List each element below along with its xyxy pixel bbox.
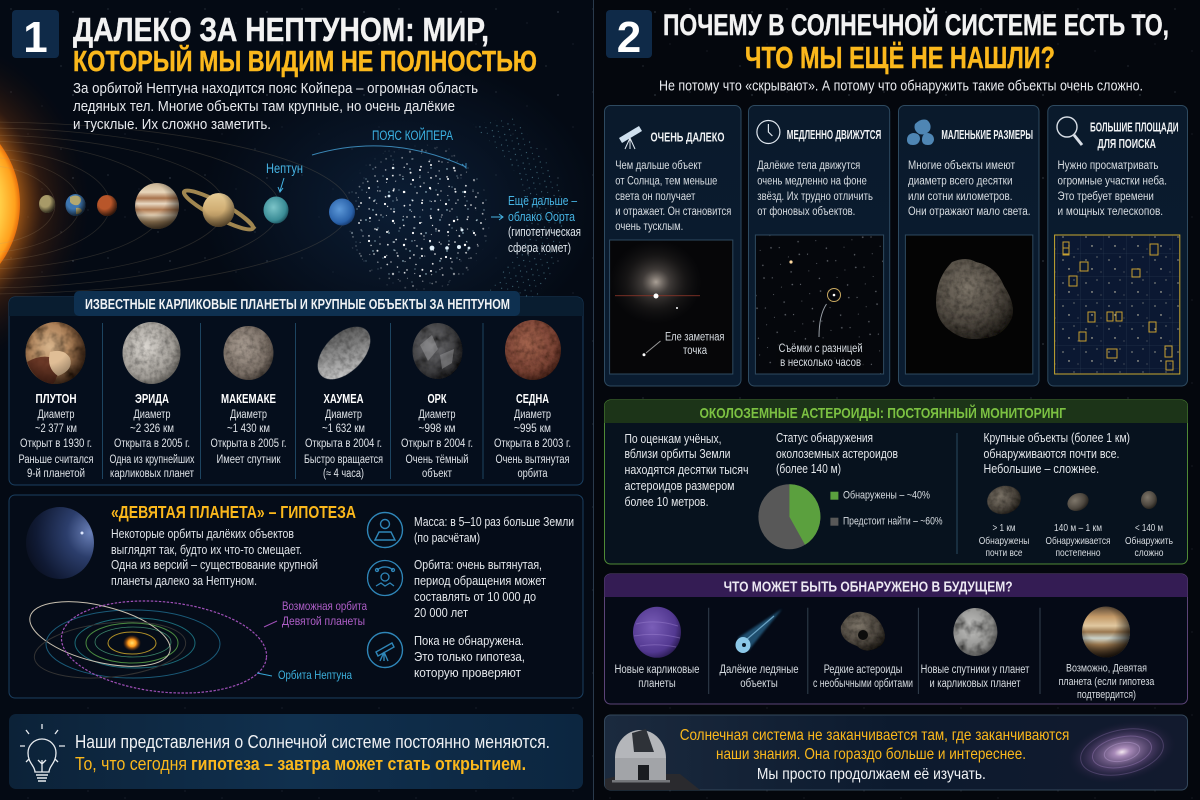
Haumea text: (≈ 4 часа) [323,468,364,480]
image: sky survey [1055,235,1180,374]
Kuiper belt dots [343,144,490,291]
closing text: наши знания. Она гораздо больше и интереснее. [716,746,1026,763]
image: faint point: Еле заметная [665,332,724,344]
label: Kuiper belt [312,128,466,168]
Sedna text [494,392,571,480]
possibly planet nine: планета (если гипотеза [1059,676,1155,688]
Sedna text: Диаметр [514,409,551,421]
large objects text: обнаруживаются почти все. [984,447,1120,461]
badge: number 2: 2 [617,13,641,62]
large objects text [984,431,1130,476]
Pluto text: Открыт в 1930 г. [20,438,92,450]
Haumea [308,317,380,389]
card title: ДЛЯ ПОИСКА [1098,136,1156,151]
asteroid: small: сложно [1134,547,1164,559]
Sedna text: ~995 км [514,423,551,435]
detection status heading: Статус обнаружения [776,431,873,445]
image: moving object [755,235,884,374]
asteroid: small [1125,491,1173,559]
intro paragraph: ледяных тел. Многие объекты там крупные, но очень далёкие [73,99,455,115]
card text: и мощных телескопов. [1058,206,1163,218]
asteroid: small: < 140 м [1135,522,1163,534]
Sedna text: орбита [518,468,548,480]
fact: orbit: 20 000 лет [414,605,468,620]
Makemake text: МАКЕМАКЕ [221,392,276,406]
Saturn [181,185,256,235]
galaxy [1061,711,1183,793]
asteroid estimate text: вблизи орбиты Земли [624,447,731,461]
banner: closing statement [604,711,1188,793]
label: Neptune: Нептун [266,161,303,176]
panel: ninth planet hypothesis [9,495,583,703]
fact: mass [414,514,574,545]
legend: Обнаружены – ~40% [843,490,930,502]
legend: Предстоит найти – ~60% [843,516,943,528]
card text: очень тусклым. [615,221,683,233]
icy objects: Далёкие ледяные [720,664,798,676]
card title: МАЛЕНЬКИЕ РАЗМЕРЫ [941,127,1033,142]
large objects text: Небольшие – сложнее. [984,462,1099,476]
image: moving object: в несколько часов [780,357,861,369]
section 1 heading [12,10,537,133]
panel: slow movement [748,106,890,386]
orbit diagram [23,589,271,703]
observatory [605,729,700,790]
callout: knowledge changes [9,714,583,789]
Orcus text: Диаметр [418,409,456,421]
rare asteroids: Редкие астероиды [824,664,902,676]
badge: number 1 [12,10,59,62]
intro paragraph: и тусклые. Их сложно заметить. [73,117,271,133]
Eris text: Диаметр [134,409,170,421]
new dwarf planets: планеты [638,678,676,690]
Pluto text [18,392,94,480]
Makemake [224,326,274,380]
label: possible orbit: Девятой планеты [282,614,365,628]
asteroid estimate text [624,432,748,509]
card text [1058,160,1167,218]
panel: small size [898,106,1039,386]
Neptune planet [329,198,355,226]
Makemake text: Имеет спутник [216,454,281,466]
rare asteroids: с необычными орбитами [813,678,913,690]
fact: mass: (по расчётам) [414,530,480,545]
intro paragraph [73,81,478,133]
asteroid: medium: постепенно [1056,547,1101,559]
card text [757,160,873,218]
legend [830,490,943,528]
label: Neptune orbit [257,668,352,682]
heading: dwarf planets: ИЗВЕСТНЫЕ КАРЛИКОВЫЕ ПЛАНЕТЫ И КРУПНЫЕ ОБЪЕКТЫ ЗА НЕПТУНОМ [85,297,510,313]
Pluto [26,322,86,384]
panel: very far [604,106,741,386]
Eris text: Одна из крупнейших [110,454,195,466]
badge: number 2 [606,10,652,62]
image: faint point [610,240,733,374]
hypothesis paragraph: Некоторые орбиты далёких объектов [111,527,294,541]
asteroid: medium: 140 м – 1 км [1054,522,1102,534]
card text: звёзд. Их трудно отличить [757,191,873,203]
hypothesis paragraph: выглядят так, будто их что-то смещает. [111,543,302,557]
fact: not found: Пока не обнаружена. [414,633,524,648]
heading: future: ЧТО МОЖЕТ БЫТЬ ОБНАРУЖЕНО В БУДУЩЕМ? [724,580,1013,596]
card text: и отражает. Он становится [615,206,731,218]
Sedna [505,320,561,380]
Haumea text: Открыта в 2004 г. [305,438,382,450]
hypothesis paragraph: Одна из версий – существование крупной [111,558,318,572]
card text: Чем дальше объект [615,160,702,172]
hypothesis heading: «ДЕВЯТАЯ ПЛАНЕТА» – ГИПОТЕЗА [111,502,356,522]
icon: telescope [368,632,402,668]
label: Neptune orbit: Орбита Нептуна [278,668,352,682]
Eris [122,322,180,384]
Jupiter [135,183,179,229]
icy objects: объекты [740,678,778,690]
Uranus [264,196,288,224]
detection status heading: (более 140 м) [776,462,841,476]
asteroid: small: Обнаружить [1125,535,1173,547]
asteroid: large [979,482,1029,559]
Pluto text: 9-й планетой [27,468,85,480]
card title [1090,120,1179,151]
card text: Они отражают мало света. [908,206,1030,218]
label: Oort cloud: Ещё дальше – [508,193,578,208]
asteroid: large: Обнаружены [979,535,1029,547]
intro paragraph: За орбитой Нептуна находится пояс Койпера – огромная область [73,81,478,97]
possibly planet nine: подтвердится) [1077,689,1136,701]
detection status heading [776,431,898,476]
icon: orbit [368,560,402,596]
callout line 2: То, что сегодня [75,754,187,774]
icon: clock [757,120,780,144]
Pluto text: Диаметр [38,409,74,421]
sun [0,34,90,374]
card text: или сотни километров. [908,191,1012,203]
Mercury [39,195,55,213]
asteroid: medium: Обнаруживается [1046,535,1110,547]
icon: light bulb [20,724,65,781]
asteroid: large: > 1 км [992,522,1016,534]
image: small asteroid [905,235,1033,374]
Orcus text: Открыт в 2004 г. [401,438,473,450]
new moons: Новые спутники у планет [921,664,1030,676]
fact: not found [414,633,525,680]
label: Neptune [266,161,303,192]
Sedna text: Открыта в 2003 г. [494,438,571,450]
card text: Нужно просматривать [1058,160,1159,172]
heading: asteroids: ОКОЛОЗЕМНЫЕ АСТЕРОИДЫ: ПОСТОЯННЫЙ МОНИТОРИНГ [700,404,1066,422]
Makemake text: Диаметр [230,409,267,421]
panel: future discoveries [604,574,1188,704]
fact: orbit: период обращения может [414,573,546,588]
fact: orbit: составлять от 10 000 до [414,589,536,604]
Orcus text: объект [422,468,453,480]
image: moving object: Съёмки с разницей [779,343,863,355]
fact: mass: Масса: в 5–10 раз больше Земли [414,514,574,529]
Orcus text: Очень тёмный [406,454,468,466]
card text: от фоновых объектов. [757,206,855,218]
Earth [66,194,86,216]
closing text [680,727,1069,783]
card title: ОЧЕНЬ ДАЛЕКО [650,130,724,144]
card text: огромные участки неба. [1058,176,1167,188]
Orcus [412,323,462,379]
Oort cloud dots [474,118,564,296]
title line 1: ДАЛЕКО ЗА НЕПТУНОМ: МИР, [73,12,489,49]
Haumea text: ХАУМЕА [324,392,364,406]
card text: Многие объекты имеют [908,160,1016,172]
Haumea text: ~1 632 км [322,423,365,435]
Eris text: карликовых планет [110,468,195,480]
panel: near-Earth asteroids [604,400,1188,564]
icy objects [720,609,798,690]
asteroid: large: почти все [986,547,1023,559]
label: Oort cloud: сфера комет) [508,241,571,255]
card text [908,160,1030,218]
icon: rocks [907,120,934,145]
possibly planet nine: Возможно, Девятая [1066,663,1147,675]
Haumea text [304,392,383,480]
section 2 heading [606,8,1169,94]
card text: света он получает [615,191,696,203]
detection status heading: околоземных астероидов [776,447,898,461]
label: possible orbit: Возможная орбита [282,599,367,613]
Sedna text: СЕДНА [516,392,549,406]
hypothesis paragraph: планеты далеко за Нептуном. [111,574,257,588]
fact: not found: которую проверяют [414,665,521,680]
new moons: и карликовых планет [930,678,1021,690]
Orcus text: ~998 км [418,423,456,435]
possibly planet nine [1059,606,1155,701]
card title: МЕДЛЕННО ДВИЖУТСЯ [787,127,881,142]
planet nine [26,507,94,579]
Haumea text: Диаметр [325,409,362,421]
label: Kuiper belt: ПОЯС КОЙПЕРА [372,128,453,143]
Orcus text: ОРК [428,392,447,406]
closing text: Солнечная система не заканчивается там, где заканчиваются [680,727,1069,744]
Pluto text: ~2 377 км [35,423,77,435]
label: Oort cloud: облако Оорта [508,209,576,224]
asteroid estimate text: астероидов размером [624,479,734,493]
new dwarf planets [614,607,700,690]
Sedna text: Очень вытянутая [496,454,570,466]
image: faint point: точка [683,345,708,357]
solar system illustration [0,74,580,334]
Makemake text [210,392,286,466]
rare asteroids [813,612,913,690]
Eris text: ЭРИДА [135,392,169,406]
badge: number 1: 1 [23,13,48,62]
label: possible orbit [264,599,367,628]
fact: not found: Это только гипотеза, [414,649,525,664]
large objects text: Крупные объекты (более 1 км) [984,431,1130,445]
Eris text: ~2 326 км [130,423,174,435]
title line 2: КОТОРЫЙ МЫ ВИДИМ НЕ ПОЛНОСТЬЮ [73,44,537,78]
Orcus text [401,392,473,480]
label: Oort cloud: (гипотетическая [508,225,581,239]
card text: Это требует времени [1058,191,1154,203]
callout line 1: Наши представления о Солнечной системе постоянно меняются. [75,732,550,752]
card text [615,160,731,233]
asteroid estimate text: более 10 метров. [624,495,708,509]
callout line 2 [75,754,526,774]
new moons [921,608,1030,690]
pie chart [758,484,820,549]
card text: Далёкие тела движутся [757,160,860,172]
Mars [97,195,117,216]
icon: mass [368,512,402,548]
asteroid estimate text: По оценкам учёных, [624,432,722,446]
fact: orbit: Орбита: очень вытянутая, [414,557,542,572]
icon: magnifier [1057,117,1082,145]
Eris text: Открыта в 2005 г. [114,438,190,450]
closing text: Мы просто продолжаем её изучать. [757,766,986,783]
asteroid estimate text: находятся десятки тысяч [624,463,748,477]
panel: dwarf planets [9,291,583,485]
heading: dwarf planets [74,291,520,316]
new dwarf planets: Новые карликовые [614,664,700,676]
label: Oort cloud [491,193,581,255]
Pluto text: Раньше считался [18,454,94,466]
Makemake text: Открыта в 2005 г. [210,438,286,450]
Makemake text: ~1 430 км [227,423,270,435]
icon: telescope [619,126,642,149]
card text: диаметр всего десятки [908,176,1012,188]
title line 2: ЧТО МЫ ЕЩЁ НЕ НАШЛИ? [745,40,1055,75]
Pluto text: ПЛУТОН [36,392,76,406]
card text: от Солнца, тем меньше [615,176,717,188]
fact: orbit [414,557,546,620]
Haumea text: Быстро вращается [304,454,383,466]
hypothesis paragraph [111,527,318,588]
Eris text [110,392,195,480]
panel: large search areas [1048,106,1188,386]
card text: очень медленно на фоне [757,176,867,188]
orbit lines [0,122,350,294]
callout line 2: гипотеза – завтра может стать открытием. [191,754,526,774]
asteroid: medium [1046,490,1110,559]
